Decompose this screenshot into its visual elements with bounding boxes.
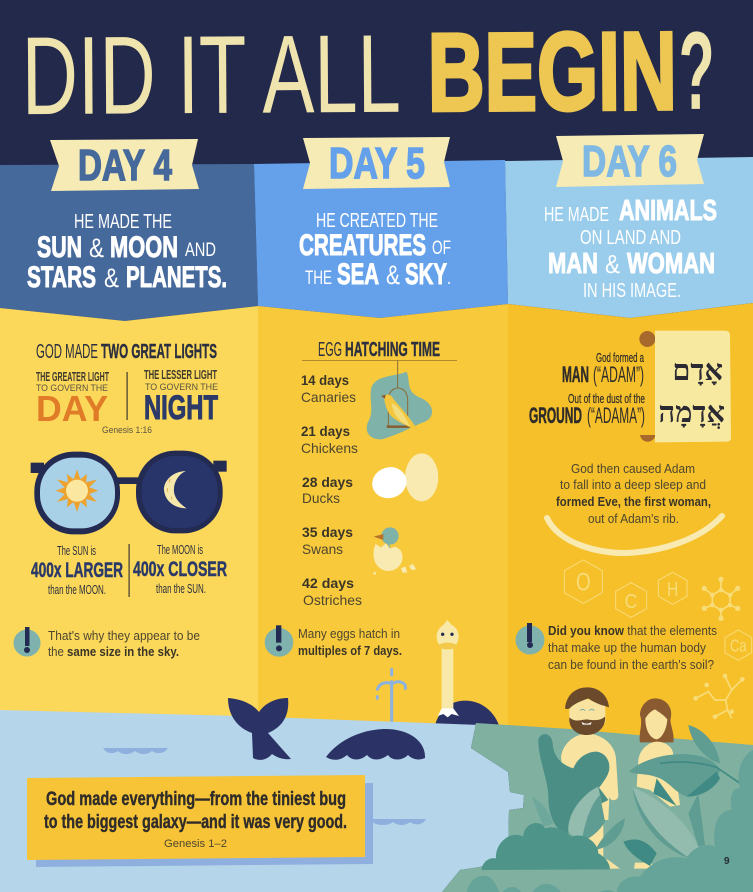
text: day 5 summary [299,210,451,291]
text: man from the ground: MAN [562,362,589,387]
text: citation genesis 1:16: Genesis 1:16 [102,425,152,436]
plant: right bushes [617,750,753,892]
text: Eve formed from rib: God then caused Adam [571,462,695,476]
icon: rib [547,516,722,553]
text: day 6 summary: WOMAN [627,248,715,280]
text: day 4 summary: SUN [37,231,82,264]
panel: day 5 yellow column [258,304,508,730]
text: lesser light for the night: THE LESSER LIGHT [144,368,217,382]
text: sun comparison: 400x LARGER [31,559,123,582]
text: greater light for the day: DAY [36,388,108,429]
text: day 4 summary [27,211,227,294]
text: Eve formed from rib: out of Adam's rib. [588,512,679,526]
text: lesser light for the night [144,368,218,427]
panel: day 5 blue band [254,160,508,318]
text: lesser light for the night: NIGHT [144,389,218,427]
list: hatching days: Ostriches [303,592,362,608]
list: hatching days: Swans [302,541,343,557]
callout: same size in the sky: the same size in the sky. [48,645,179,659]
list: hatching days: Ducks [302,490,340,506]
text: day 6 summary: ON LAND AND [580,227,681,249]
callout: elements in the soil: that make up the human body [548,641,707,655]
panel: day 6 yellow column [508,303,753,750]
text: lesser light for the night: TO GOVERN THE [145,382,218,393]
page number: 9 [724,856,730,867]
figure: Eve [634,698,680,869]
text: day 5 summary: THE [305,268,332,289]
list: hatching days: Canaries [301,389,356,405]
text: day 5 summary: SKY [405,258,447,291]
text: greater light for the day: THE GREATER LIGHT [36,370,109,384]
callout: God made everything: Genesis 1–2 [164,838,227,850]
text: day 4 summary: & [104,263,119,293]
text: day 4 summary: & [89,233,104,263]
list: hatching days: 14 days [301,372,349,388]
icon: two eggs [368,453,438,503]
text: greater light for the day [36,370,109,429]
list: hatching days: 21 days [301,423,350,439]
heading: two great lights [36,340,217,363]
icon: wave right [365,819,426,825]
text: Hebrew adam: אָדָם [672,355,723,387]
callout: God made everything [27,775,373,867]
figure: Adam [561,687,620,869]
illustrations: column 2 animals [265,361,438,657]
text: day 5 summary: SEA [337,258,379,291]
text: day 5 summary: . [447,268,451,289]
list: hatching days: 42 days [302,575,354,591]
callout: God made everything: to the biggest galaxy—and it was very good. [44,812,347,833]
icon: hatching chick [373,527,416,575]
text: moon comparison: 400x CLOSER [133,558,227,581]
panel: day 6 blue band [505,157,753,318]
icon: sunglasses with sun and moon [31,451,227,534]
heading: two great lights: GOD MADE [36,340,98,363]
text: day 4 summary: MOON [110,231,178,264]
icon: wave left [103,748,168,754]
plant: large central leafy plant [532,734,625,850]
text: moon comparison: The MOON is [157,543,203,557]
text: man from the ground: (“ADAMA”) [587,403,645,428]
text: man from the ground: (“ADAM”) [593,362,644,387]
icon: exclamation day 6 [516,623,544,654]
heading: two great lights: TWO GREAT LIGHTS [101,340,217,363]
icon: element hexagons and molecules: O [576,570,591,597]
text: day 5 summary: HE CREATED THE [316,210,438,232]
text: Eve formed from rib [556,462,711,526]
callout: multiples of 7 days [298,627,402,658]
plant: lower left bush [482,823,610,870]
text: greater light for the day: TO GOVERN THE [36,383,108,394]
icon: element hexagons and molecules: H [667,579,678,601]
text: day 6 summary: IN HIS IMAGE. [583,280,681,302]
icon: exclamation day 5 [265,625,293,657]
list: hatching days [301,372,362,608]
panel: day 4 yellow column [0,306,258,720]
text: day 6 summary: HE MADE [544,204,609,226]
icon: moon [164,471,187,508]
text: day 6 summary: & [605,249,620,279]
heading: egg hatching time: EGG [318,338,342,361]
icon: exclamation day 4 [14,627,40,656]
callout: same size in the sky: That's why they appear to be [48,629,200,643]
callout: elements in the soil: Did you know that the elements [548,624,717,638]
panel: water [0,710,524,892]
illustration: whale body [326,729,425,760]
text: man from the ground [529,351,645,428]
callout: same size in the sky [48,629,200,659]
panel: land [442,723,753,892]
illustration: whale tail [228,698,291,760]
text: day 4 summary: PLANETS. [126,261,227,294]
text: sun comparison: The SUN is [57,544,96,558]
text: sun comparison [31,544,123,597]
day 4 banner: DAY 4 [78,141,172,190]
text: day 6 summary: MAN [548,248,598,280]
text: man from the ground: God formed a [596,351,644,365]
plant: palm leaf and large leaves [623,725,740,866]
icon: canary on a swing [367,361,432,439]
illustration: ostrich [435,620,500,728]
callout: God made everything: God made everything—from the tiniest bug [46,789,346,810]
text: day 5 summary: CREATURES [299,229,426,262]
text: Hebrew adama: אֲדָמָה [659,397,725,429]
text: day 4 summary: STARS [27,261,96,294]
callout: elements in the soil [548,624,717,672]
text: man from the ground: GROUND [529,403,582,428]
text: day 6 summary: ANIMALS [619,195,717,227]
list: hatching days: 35 days [302,524,353,540]
plant: bottom foreground bushes [467,876,617,892]
text: moon comparison [133,543,227,596]
callout: multiples of 7 days: multiples of 7 days. [298,644,402,658]
heading: egg hatching time: HATCHING TIME [345,338,440,361]
callout: multiples of 7 days: Many eggs hatch in [298,627,400,641]
title: DID IT ALL [21,12,401,138]
icon: element hexagons and molecules [564,560,752,719]
title: ? [678,9,715,133]
text: man from the ground: Out of the dust of the [568,392,645,406]
list: hatching days: Chickens [301,440,358,456]
icon: element hexagons and molecules: Ca [730,635,747,655]
heading: egg hatching time [302,338,457,361]
text: Eve formed from rib: formed Eve, the first woman, [556,495,711,509]
callout: elements in the soil: can be found in the earth's soil? [548,658,714,672]
day 5 banner: DAY 5 [329,139,425,188]
icon: sun [56,469,98,512]
text: day 5 summary: & [386,260,400,290]
text: day 4 summary: AND [185,240,216,261]
text: day 6 summary [544,195,717,302]
text: moon comparison: than the SUN. [156,582,206,596]
text: day 4 summary: HE MADE THE [74,211,172,233]
icon: element hexagons and molecules: C [625,590,637,613]
text: day 5 summary: OF [432,238,451,259]
day 6 banner: DAY 6 [582,137,677,186]
text: Eve formed from rib: to fall into a deep sleep and [560,478,706,492]
illustration: scroll with Hebrew words [639,331,731,442]
list: hatching days: 28 days [302,474,353,490]
illustration: Adam, Eve and plants [467,687,753,892]
illustration: water spout [377,669,405,723]
panel: day 4 blue band [0,164,258,321]
text: sun comparison: than the MOON. [48,583,106,597]
